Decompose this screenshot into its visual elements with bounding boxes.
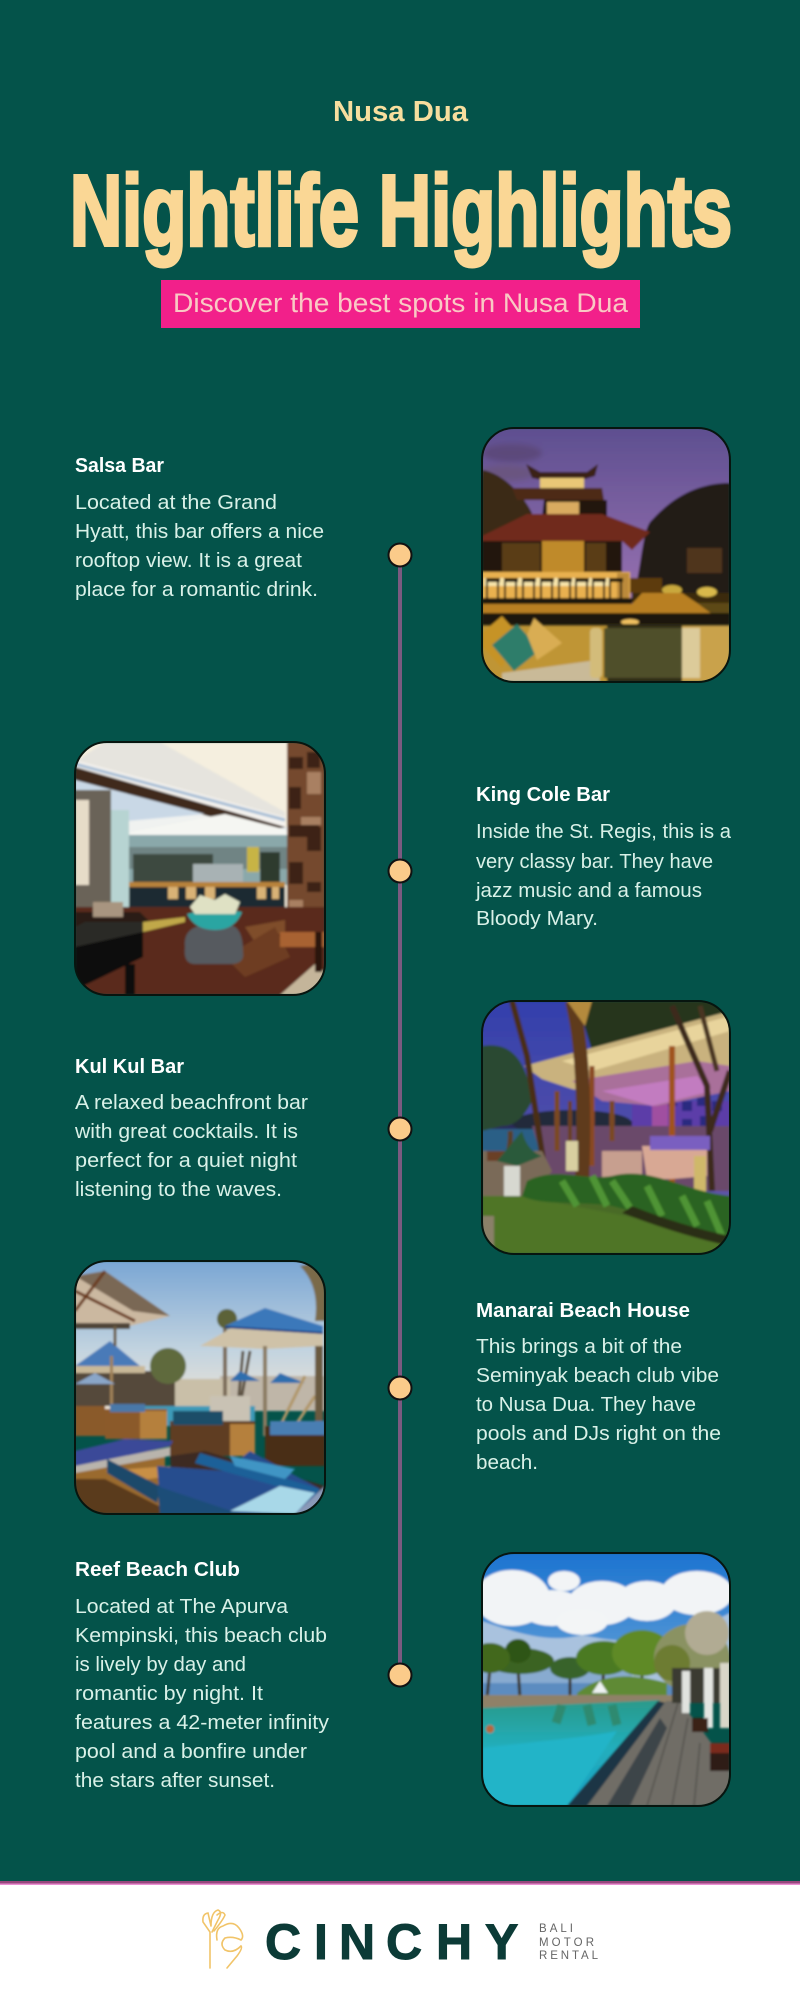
text block: King Cole Bar (475, 784, 732, 930)
text block: Manarai Beach House: to Nusa Dua. They have (476, 1393, 696, 1416)
text block: Manarai Beach House (476, 1300, 721, 1474)
text block: Reef Beach Club: Kempinski, this beach club (75, 1624, 327, 1647)
text block: Salsa Bar (75, 455, 324, 601)
text block: King Cole Bar: Bloody Mary. (476, 907, 598, 930)
image: Manarai Beach House pool loungers (74, 1260, 326, 1515)
image: Reef Beach Club infinity pool (481, 1552, 731, 1807)
footer (0, 1881, 800, 2000)
text block: Kul Kul Bar: listening to the waves. (75, 1178, 282, 1201)
subtitle banner: Discover the best spots in Nusa Dua (173, 288, 629, 318)
text block: Reef Beach Club: Reef Beach Club (75, 1559, 240, 1581)
text block: King Cole Bar: jazz music and a famous (475, 879, 702, 902)
text block: Manarai Beach House: pools and DJs right on the (476, 1422, 721, 1445)
logo: Cinchy Bali Motor Rental (202, 1909, 599, 1970)
text block: Reef Beach Club: pool and a bonfire under (75, 1740, 307, 1763)
text block: Reef Beach Club: the stars after sunset. (75, 1769, 275, 1792)
deck (587, 1701, 730, 1806)
text block: Reef Beach Club: romantic by night. It (75, 1682, 263, 1705)
pool edge (567, 1701, 666, 1806)
text block: Kul Kul Bar (74, 1056, 308, 1201)
text block: Reef Beach Club: is lively by day and (75, 1653, 246, 1676)
text block: Salsa Bar: rooftop view. It is a great (75, 549, 302, 572)
timeline dot 3 (388, 1118, 412, 1140)
text block: Kul Kul Bar: perfect for a quiet night (75, 1149, 297, 1172)
text block: Salsa Bar: Hyatt, this bar offers a nice (75, 520, 324, 543)
tagline: MOTOR (539, 1937, 594, 1949)
text block: Salsa Bar: Salsa Bar (75, 455, 164, 477)
footer rule (0, 1881, 800, 1885)
timeline dot 4 (388, 1376, 412, 1400)
text block: King Cole Bar: King Cole Bar (476, 784, 610, 806)
text block: Kul Kul Bar: A relaxed beachfront bar (75, 1091, 308, 1114)
image: Kul Kul Bar beachfront canopy (481, 1000, 731, 1255)
text block: King Cole Bar: very classy bar. They have (476, 850, 713, 873)
text block: Salsa Bar: place for a romantic drink. (75, 578, 318, 601)
text block: Kul Kul Bar: with great cocktails. It is (74, 1120, 298, 1143)
wordmark: CINCHY (265, 1914, 518, 1970)
text block: King Cole Bar: Inside the St. Regis, this is a (476, 820, 732, 843)
image: King Cole Bar interior (74, 741, 326, 996)
kicker: Nusa Dua: Nusa Dua (333, 96, 469, 128)
timeline (388, 542, 412, 1688)
image: Salsa Bar pagoda at dusk (481, 427, 731, 683)
subtitle banner (161, 280, 640, 328)
tagline: BALI (539, 1923, 573, 1935)
icon: hand gesture (203, 1910, 243, 1968)
pool water (482, 1700, 660, 1806)
timeline dot 2 (388, 860, 412, 882)
text block: Manarai Beach House: Manarai Beach House (476, 1300, 690, 1322)
timeline dot 5 (388, 1664, 412, 1686)
text block: Kul Kul Bar: Kul Kul Bar (75, 1056, 184, 1078)
text block: Reef Beach Club: features a 42-meter infinity (75, 1711, 330, 1734)
text block: Reef Beach Club: Located at The Apurva (75, 1595, 289, 1618)
text block: Manarai Beach House: This brings a bit of the (476, 1335, 682, 1358)
tagline (539, 1923, 599, 1962)
text block: Salsa Bar: Located at the Grand (75, 491, 277, 514)
text block: Manarai Beach House: Seminyak beach club vibe (476, 1364, 719, 1387)
text block: Manarai Beach House: beach. (476, 1451, 538, 1474)
timeline dot 1 (388, 544, 412, 566)
tagline: RENTAL (539, 1950, 599, 1962)
clouds (474, 1570, 733, 1635)
text block: Reef Beach Club (75, 1559, 330, 1792)
